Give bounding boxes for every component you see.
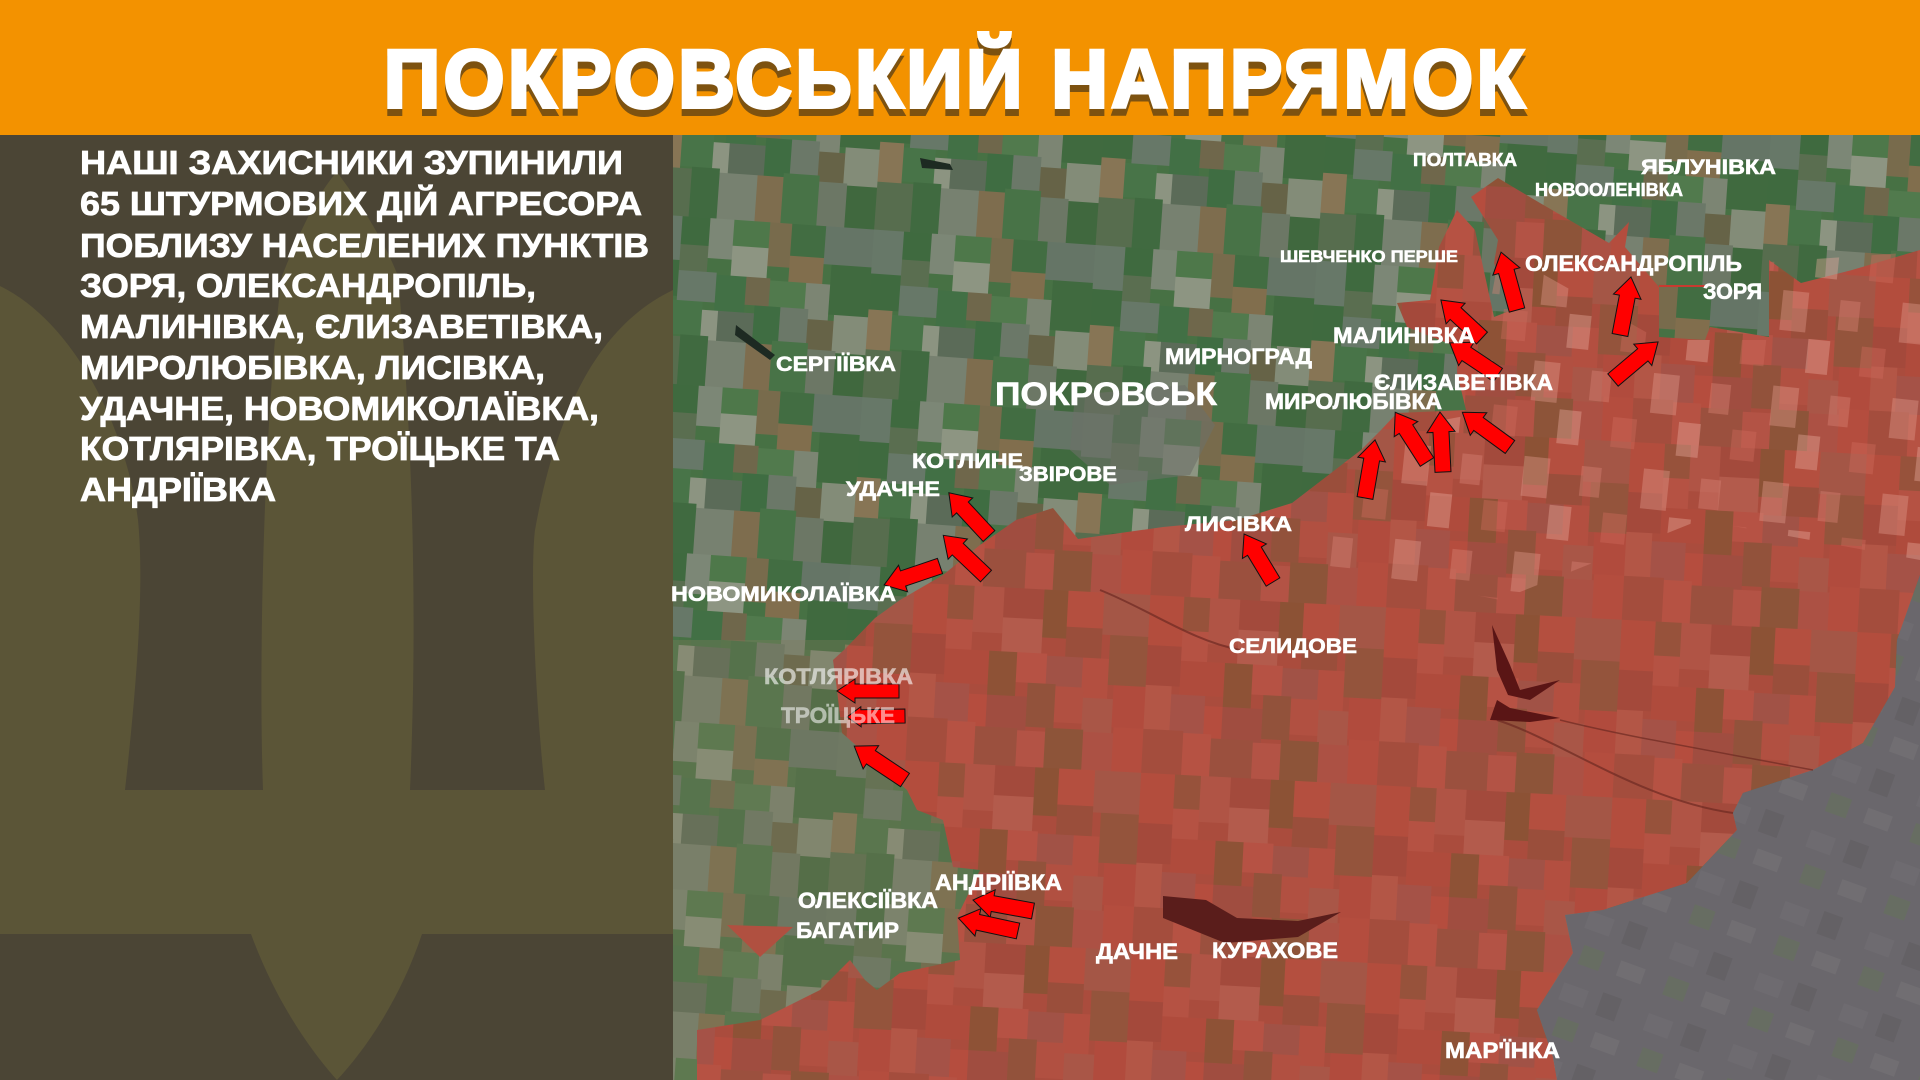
arrow: south of Troitske bbox=[846, 735, 913, 792]
label: Kotlyne: КОТЛИНЕ bbox=[912, 450, 1023, 473]
arrow: Myroliubivka east bbox=[1383, 405, 1439, 470]
panel: left text panel with trident bbox=[0, 135, 673, 1080]
label: Kurakhove: КУРАХОВЕ bbox=[1212, 938, 1338, 963]
arrows: attack directions bbox=[837, 248, 1667, 945]
label: Bahatyr: БАГАТИР bbox=[796, 918, 899, 943]
occupied patch near Bahatyr bbox=[727, 925, 793, 957]
reservoir: Kurakhove bbox=[1163, 896, 1341, 943]
label: Zorya: ЗОРЯ bbox=[1703, 279, 1762, 304]
label: Marinka: МАР'ЇНКА bbox=[1445, 1038, 1560, 1063]
settlement: Pokrovsk urban area bbox=[1070, 385, 1215, 485]
label: Myroliubivka: МИРОЛЮБІВКА bbox=[1265, 389, 1442, 414]
map labels: settlement names bbox=[671, 150, 1776, 1063]
arrow: Udachne bbox=[934, 525, 996, 586]
arrow: Shevchenko bbox=[1431, 290, 1492, 348]
arrow: Myroliubivka south bbox=[1351, 437, 1389, 500]
arrow: Bahatyr bbox=[955, 904, 1021, 945]
arrow: Troitske bbox=[847, 706, 905, 727]
label: Zvirove: ЗВІРОВЕ bbox=[1019, 463, 1117, 486]
label: Andriivka: АНДРІЇВКА bbox=[935, 870, 1062, 895]
text block: summary: АНДРІЇВКА bbox=[80, 471, 276, 508]
label: Kotliarivka: КОТЛЯРІВКА bbox=[764, 664, 913, 689]
arrow: Novomykolaivka bbox=[880, 553, 944, 598]
pale fields tint in northeast bbox=[1300, 250, 1920, 600]
label: Troitske: ТРОЇЦЬКЕ bbox=[781, 703, 895, 728]
text block: summary: ПОБЛИЗУ НАСЕЛЕНИХ ПУНКТІВ bbox=[80, 227, 649, 264]
title: ПОКРОВСЬКИЙ НАПРЯМОК bbox=[384, 33, 1528, 125]
text block: summary: НАШІ ЗАХИСНИКИ ЗУПИНИЛИ bbox=[80, 144, 623, 181]
arrow: Yelyzavetivka east bbox=[1454, 401, 1518, 458]
text block: summary bbox=[80, 144, 649, 508]
label: Oleksandropil: ОЛЕКСАНДРОПІЛЬ bbox=[1525, 251, 1742, 276]
text block: summary: УДАЧНЕ, НОВОМИКОЛАЇВКА, bbox=[80, 390, 599, 427]
text block: summary: КОТЛЯРІВКА, ТРОЇЦЬКЕ ТА bbox=[80, 430, 560, 467]
label: Yelyzavetivka: ЄЛИЗАВЕТІВКА bbox=[1374, 370, 1553, 395]
arrow: Oleksandropil north bbox=[1606, 274, 1645, 338]
text block: summary: ЗОРЯ, ОЛЕКСАНДРОПІЛЬ, bbox=[80, 267, 536, 304]
occupied territory: red zone bbox=[697, 178, 1920, 1080]
arrow: Lysivka bbox=[1232, 527, 1285, 589]
label: Malynivka: МАЛИНІВКА bbox=[1333, 323, 1475, 348]
label: Pokrovsk: ПОКРОВСЬК bbox=[995, 376, 1218, 412]
text block: summary: 65 ШТУРМОВИХ ДІЙ АГРЕСОРА bbox=[80, 184, 642, 222]
label: Lysivka: ЛИСІВКА bbox=[1185, 513, 1292, 536]
panel: satellite map bbox=[673, 135, 1920, 1080]
reservoirs: central stream bbox=[1492, 625, 1560, 700]
label: Novoolenivka: НОВООЛЕНІВКА bbox=[1535, 180, 1683, 200]
label: Selydove: СЕЛИДОВЕ bbox=[1229, 635, 1357, 658]
sliver near Oleksandropil bbox=[1659, 285, 1705, 287]
arrow: Oleksandropil west bbox=[1488, 248, 1530, 314]
muted southwest farmland tint bbox=[673, 640, 973, 1080]
label: Oleksiivka: ОЛЕКСІЇВКА bbox=[798, 888, 938, 913]
label: Myrnohrad: МИРНОГРАД bbox=[1165, 344, 1312, 369]
label: Udachne: УДАЧНЕ bbox=[846, 478, 940, 501]
label: Shevchenko Pershe: ШЕВЧЕНКО ПЕРШЕ bbox=[1280, 247, 1458, 266]
text block: summary: МИРОЛЮБІВКА, ЛИСІВКА, bbox=[80, 349, 545, 386]
label: Dachne: ДАЧНЕ bbox=[1096, 939, 1178, 964]
text block: summary: МАЛИНІВКА, ЄЛИЗАВЕТІВКА, bbox=[80, 308, 603, 345]
label: Yablunivka: ЯБЛУНІВКА bbox=[1641, 156, 1776, 179]
label: Poltavka: ПОЛТАВКА bbox=[1413, 150, 1517, 170]
label: Novomykolaivka: НОВОМИКОЛАЇВКА bbox=[671, 583, 896, 606]
arrow: Kotlyne bbox=[939, 483, 999, 546]
arrow: Malynivka bbox=[1442, 331, 1506, 387]
label: Serhiivka: СЕРГІЇВКА bbox=[776, 353, 896, 376]
rivers and streams bbox=[1100, 590, 1813, 813]
trident emblem background bbox=[0, 172, 673, 1080]
arrow: Kotliarivka bbox=[837, 679, 899, 703]
arrow: Andriivka bbox=[970, 886, 1036, 925]
grey city: Donetsk area bbox=[1537, 575, 1920, 1080]
dark ponds in green zone bbox=[735, 158, 953, 360]
arrow: Yelyzavetivka south bbox=[1426, 411, 1457, 473]
header band bbox=[0, 0, 1920, 135]
arrow: Zorya bbox=[1604, 331, 1667, 391]
